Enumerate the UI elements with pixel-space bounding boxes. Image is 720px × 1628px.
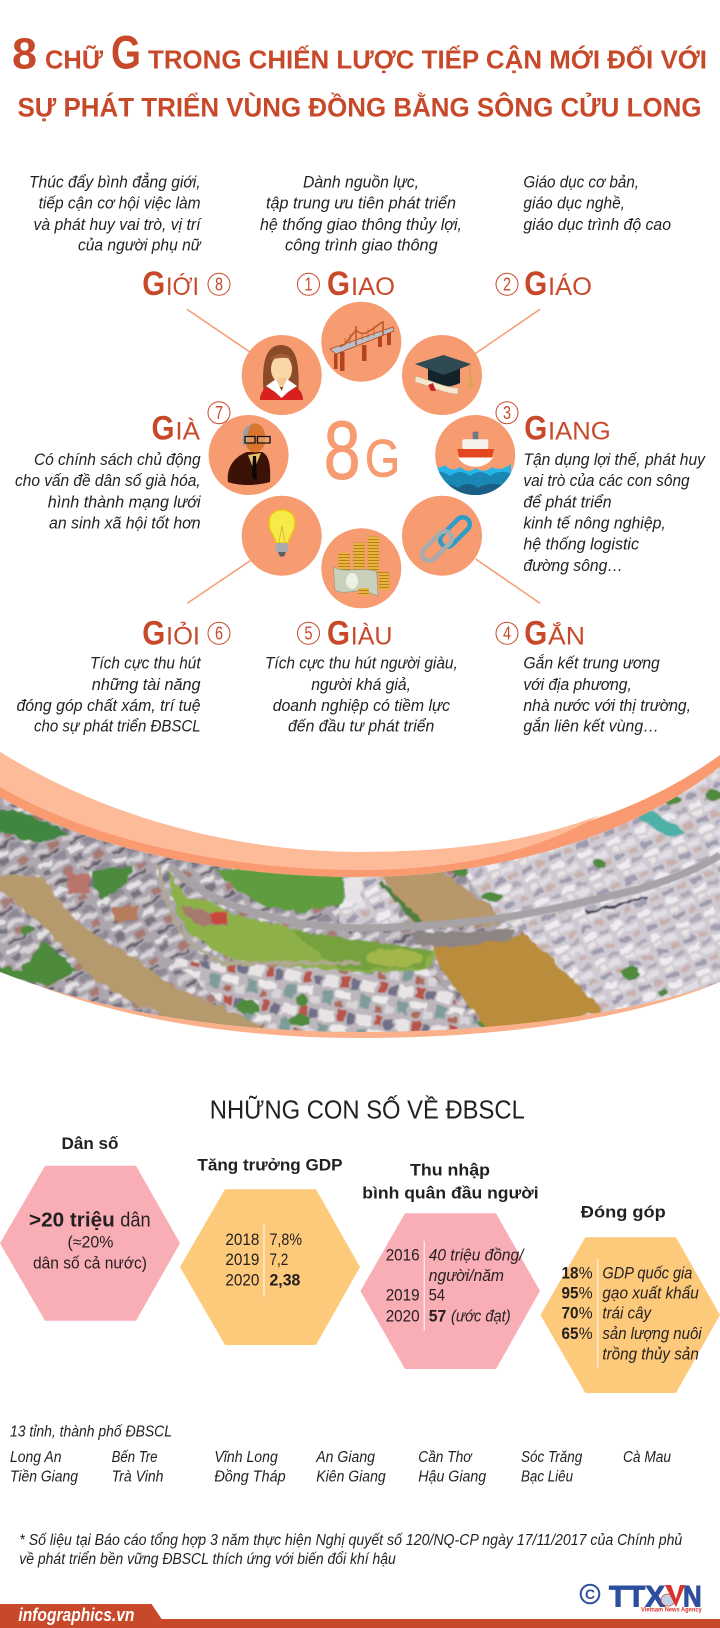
label: 4 Gắn: 4 xyxy=(503,624,511,644)
list: 13 provinces: Trà Vinh xyxy=(112,1469,164,1486)
title: 8 xyxy=(12,30,37,78)
panel: contribution: % xyxy=(579,1305,593,1323)
panel: income per capita: bình quân đầu người xyxy=(362,1184,539,1202)
panel: income per capita xyxy=(360,1162,540,1369)
panel: income per capita: 57 xyxy=(429,1308,446,1326)
list: 13 provinces: An Giang xyxy=(315,1449,375,1466)
text: Giàu description: Tích cực thu hút người giàu, xyxy=(265,653,458,672)
panel: contribution: 70 xyxy=(562,1305,578,1323)
text: Giang description: vai trò của các con sông xyxy=(523,471,690,490)
panel: contribution xyxy=(540,1204,720,1393)
text: Giang description: để phát triển xyxy=(523,492,612,511)
text: Giáo description xyxy=(523,172,671,234)
label: Giỏi 6 xyxy=(142,614,230,652)
label: 2 Giáo: G xyxy=(524,265,547,303)
list: 13 provinces: Kiên Giang xyxy=(316,1469,386,1486)
title: TRONG CHIẾN LƯỢC TIẾP CẬN MỚI ĐỐI VỚI xyxy=(148,44,707,74)
text: Giang description xyxy=(523,450,706,575)
panel: GDP growth: 7,8% xyxy=(270,1231,302,1249)
list: 13 provinces: Bạc Liêu xyxy=(521,1469,573,1486)
label: 2 Giáo xyxy=(496,265,592,303)
list: 13 provinces: Cần Thơ xyxy=(418,1449,473,1466)
label: 1 Giao: 1 xyxy=(304,274,312,294)
icon circle: ship xyxy=(435,415,516,495)
panel: contribution: trái cây xyxy=(602,1305,653,1323)
label: Giỏi 6: 6 xyxy=(215,624,223,644)
text: Già description: Có chính sách chủ động xyxy=(34,450,201,469)
icon circle: bridge xyxy=(321,302,401,382)
logo: TTXVN: C xyxy=(585,1586,595,1602)
title: CHỮ xyxy=(45,44,104,74)
logo: TTXVN: N xyxy=(683,1581,702,1614)
label: 3 Giang: IANG xyxy=(548,417,611,445)
bridge deck xyxy=(170,855,720,928)
text: Giỏi description xyxy=(16,653,202,736)
text: Giao description: công trình giao thông xyxy=(285,236,438,255)
aerial photo of delta town xyxy=(0,767,720,1032)
label: 1 Giao xyxy=(298,265,395,303)
text: Giáo description: Giáo dục cơ bản, xyxy=(523,172,639,191)
list: 13 provinces: Vĩnh Long xyxy=(214,1449,278,1466)
text: Gắn description: Gắn kết trung ương xyxy=(523,653,660,672)
label: Giới 8 xyxy=(142,265,230,303)
green area north of bridge xyxy=(215,868,344,912)
footer bar xyxy=(0,1604,720,1628)
list: 13 provinces: Tiền Giang xyxy=(10,1469,78,1486)
text: Gắn description: gắn liên kết vùng… xyxy=(523,717,659,736)
label: 3 Giang xyxy=(496,402,611,447)
label: 5 Giàu: IÀU xyxy=(351,621,392,650)
panel: GDP growth: 2,38 xyxy=(270,1272,300,1290)
label: 5 Giàu xyxy=(298,614,392,652)
text: Giỏi description: đóng góp chất xám, trí tuệ xyxy=(16,696,201,715)
panel: contribution: Đóng góp xyxy=(581,1204,666,1222)
panel: income per capita: Thu nhập xyxy=(410,1162,490,1180)
text: Giang description: đường sông… xyxy=(523,556,623,575)
icon circle: chain link xyxy=(402,496,482,576)
road xyxy=(157,862,360,963)
text: Giang description: hệ thống logistic xyxy=(523,535,639,554)
text: Giới description: Thúc đẩy bình đẳng giới, xyxy=(29,172,201,191)
upper orange band dark xyxy=(0,752,720,877)
list: 13 provinces: Bến Tre xyxy=(112,1449,158,1466)
center label: 8G: 8 xyxy=(324,403,360,496)
text: Giới description: tiếp cận cơ hội việc làm xyxy=(39,194,201,213)
panel: GDP growth: 2020 xyxy=(225,1272,259,1290)
panel: income per capita: 2020 xyxy=(386,1308,420,1326)
logo: TTXVN: Vietnam News Agency xyxy=(641,1607,702,1614)
text: Giàu description xyxy=(265,653,458,736)
text: Giỏi description: cho sự phát triển ĐBSCL xyxy=(34,717,201,736)
text: Giàu description: người khá giả, xyxy=(311,675,411,694)
panel: population: dân số cả nước) xyxy=(33,1255,147,1273)
text: Giao description: tập trung ưu tiên phát triển xyxy=(266,194,456,213)
label: 3 Giang: G xyxy=(524,409,547,447)
curved photo banner xyxy=(0,750,720,1050)
list: 13 provinces xyxy=(10,1424,671,1486)
text: Già description: cho vấn đề dân số già hóa, xyxy=(15,471,201,490)
text: Già description: hình thành mạng lưới xyxy=(48,492,202,511)
text: Giáo description: giáo dục trình độ cao xyxy=(523,215,671,234)
panel: contribution: 65 xyxy=(562,1325,578,1343)
icon circle: light bulb xyxy=(242,496,322,576)
upper orange band light xyxy=(0,752,600,870)
footnote: về phát triển bền vững ĐBSCL thích ứng với biến đổi khí hậu xyxy=(19,1551,396,1568)
list: 13 provinces: Long An xyxy=(10,1449,62,1466)
title: SỰ PHÁT TRIỂN VÙNG ĐỒNG BẰNG SÔNG CỬU LONG xyxy=(18,91,702,123)
text: Giang description: Tận dụng lợi thế, phát huy xyxy=(523,450,706,469)
list: 13 provinces: Sóc Trăng xyxy=(521,1449,583,1466)
bridge underside xyxy=(410,930,513,947)
label: 5 Giàu: G xyxy=(327,614,350,652)
label: Giới 8: 8 xyxy=(215,274,223,294)
text: Giỏi description: những tài năng xyxy=(92,675,201,694)
panel: GDP growth: 2019 xyxy=(225,1251,259,1269)
panel: income per capita: 2019 xyxy=(386,1287,420,1305)
icon circle: graduation cap xyxy=(402,335,482,415)
label: Giỏi 6: IỎI xyxy=(166,620,200,650)
label: 3 Giang: 3 xyxy=(503,403,511,423)
text: Giới description xyxy=(29,172,203,255)
label: 4 Gắn: ẮN xyxy=(548,620,585,650)
label: 5 Giàu: 5 xyxy=(304,624,312,644)
label: 2 Giáo: IÁO xyxy=(548,272,592,301)
central river south of bridge xyxy=(432,933,602,1027)
label: 1 Giao: G xyxy=(327,265,350,303)
text: Giới description: của người phụ nữ xyxy=(78,236,202,255)
label: Giỏi 6: G xyxy=(142,614,165,652)
label: Già 7: IÀ xyxy=(175,416,200,445)
text: Già description: an sinh xã hội tốt hơn xyxy=(49,513,201,532)
list: 13 provinces: Cà Mau xyxy=(623,1449,671,1466)
panel: contribution: gạo xuất khẩu xyxy=(602,1285,699,1303)
text: Giới description: và phát huy vai trò, vị trí xyxy=(34,215,203,234)
label: 2 Giáo: 2 xyxy=(503,274,511,294)
label: Già 7: 7 xyxy=(215,403,223,423)
list: 13 provinces: 13 tỉnh, thành phố ĐBSCL xyxy=(10,1424,172,1441)
label: Giới 8: G xyxy=(142,265,165,303)
list: 13 provinces: Hậu Giang xyxy=(418,1469,487,1486)
panel: contribution: trồng thủy sản xyxy=(602,1345,699,1363)
icon circle: old man xyxy=(209,415,289,495)
text: Giàu description: doanh nghiệp có tiềm lực xyxy=(273,696,450,715)
text: Giàu description: đến đầu tư phát triển xyxy=(288,717,434,736)
panel: income per capita: 54 xyxy=(429,1287,445,1305)
panel: contribution: GDP quốc gia xyxy=(602,1264,692,1282)
panel: income per capita: người/năm xyxy=(429,1267,504,1285)
panel: population: >20 triệu xyxy=(29,1210,115,1232)
label: Già 7: G xyxy=(152,409,174,447)
icon circle: coins and money xyxy=(321,528,401,608)
label: Già 7 xyxy=(152,402,230,447)
panel: contribution: 95 xyxy=(562,1285,578,1303)
lower orange band xyxy=(0,970,720,1038)
panel: population: Dân số xyxy=(62,1135,118,1153)
connector lines xyxy=(187,309,540,603)
label: 4 Gắn: G xyxy=(524,614,547,652)
green strip beside river xyxy=(380,882,420,922)
text: Giáo description: giáo dục nghề, xyxy=(523,194,625,213)
text: Gắn description: với địa phương, xyxy=(523,675,632,694)
text: Giỏi description: Tích cực thu hút xyxy=(90,653,202,672)
text: Giao description: hệ thống giao thông thủy lợi, xyxy=(260,215,462,234)
logo: TTXVN: TTX xyxy=(609,1581,665,1614)
text: Giao description xyxy=(260,172,462,255)
panel: GDP growth: 2018 xyxy=(225,1231,259,1249)
panel: income per capita: (ước đạt) xyxy=(451,1308,511,1326)
text: Gắn description xyxy=(523,653,691,736)
text: Giang description: kinh tế nông nghiệp, xyxy=(523,513,666,532)
label: 4 Gắn xyxy=(496,614,585,652)
panel: income per capita: 40 triệu đồng/ xyxy=(429,1247,525,1265)
label: 1 Giao: IAO xyxy=(351,273,395,301)
center label: 8G: G xyxy=(365,430,400,489)
panel: GDP growth: Tăng trưởng GDP xyxy=(197,1157,342,1175)
panel: income per capita: 2016 xyxy=(386,1247,420,1265)
river-side vegetation xyxy=(20,789,720,1028)
title: G xyxy=(111,26,141,78)
center label: 8G xyxy=(324,403,400,496)
panel: contribution: % xyxy=(579,1325,593,1343)
panel: contribution: sản lượng nuôi xyxy=(602,1325,703,1343)
footer bar: infographics.vn xyxy=(18,1605,134,1625)
panel: contribution: % xyxy=(579,1264,593,1282)
panel: population: dân xyxy=(120,1210,151,1232)
label: Giới 8: IỚI xyxy=(166,272,199,301)
heading: statistics: NHỮNG CON SỐ VỀ ĐBSCL xyxy=(210,1094,525,1124)
text: Già description xyxy=(15,450,202,532)
panel: GDP growth: 7,2 xyxy=(270,1251,288,1269)
text: Gắn description: nhà nước với thị trường, xyxy=(523,696,691,715)
panel: contribution: 18 xyxy=(562,1264,578,1282)
logo: TTXVN xyxy=(581,1581,702,1614)
panel: population xyxy=(0,1135,180,1321)
left river xyxy=(0,875,262,1045)
panel: population: (≈20% xyxy=(68,1234,114,1252)
text: Giao description: Dành nguồn lực, xyxy=(303,172,419,191)
icon circle: woman xyxy=(242,335,322,415)
title xyxy=(12,26,707,123)
panel: contribution: % xyxy=(579,1285,593,1303)
central river north of bridge xyxy=(380,866,500,928)
panel: GDP growth xyxy=(180,1157,360,1345)
list: 13 provinces: Đồng Tháp xyxy=(214,1469,286,1486)
footnote xyxy=(19,1532,683,1568)
